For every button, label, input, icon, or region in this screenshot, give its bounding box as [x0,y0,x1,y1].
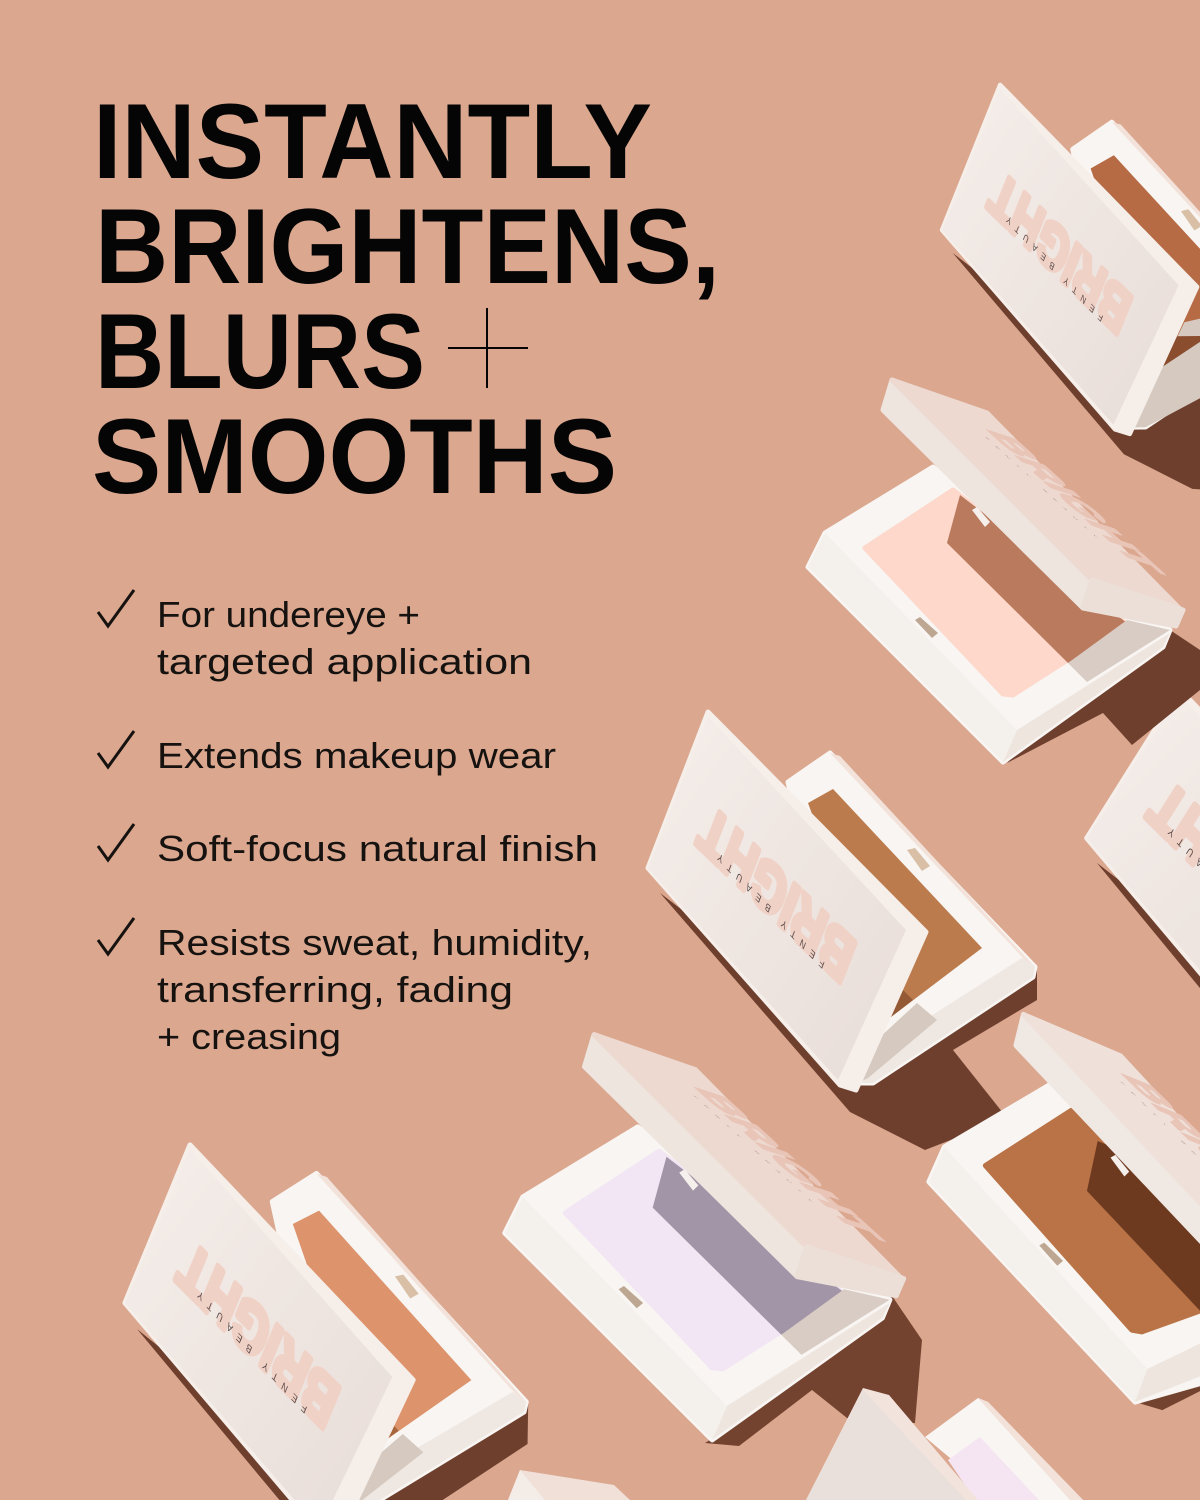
benefit: makeup wear: Extends makeup wear [157,735,556,776]
benefit: resists: transferring, fading [157,969,513,1010]
title: SMOOTHS [92,396,617,516]
benefit: finish: Soft-focus natural finish [157,828,598,869]
benefit: resists [98,918,592,1057]
compact: open, lavender: BRIGHT [684,1083,894,1244]
compact: center, bronze tan: BRIGHT [690,790,863,996]
compact: open, pale peach [808,380,1200,763]
title: BLURS [95,291,425,411]
benefit: undereye: For undereye + [157,594,420,635]
compact: open, deep bronze [921,1007,1200,1426]
title [92,81,720,516]
compact: bottom left, peach: FENTY BEAUTY [196,1287,309,1415]
compact: bottom, lavender partial [806,1388,1083,1500]
base and pan: peach [267,1172,530,1500]
compact: top right, bronze [937,82,1200,500]
compact: bottom left, peach: BRIGHT [169,1226,347,1444]
compact: bottom center, lid corner [508,1470,630,1500]
title: INSTANTLY [93,81,652,201]
compact: center, bronze tan [648,712,1037,1150]
compact: open, lavender: FENTY BEAUTY [692,1095,814,1203]
ground shadow: lavender compact [705,1290,922,1446]
compact: open, pale peach: FENTY BEAUTY [984,437,1099,538]
benefit: undereye [98,590,532,682]
benefit: resists: Resists sweat, humidity, [157,922,592,963]
benefit: finish [98,824,598,869]
benefit: resists: + creasing [157,1016,341,1057]
compact: right edge, partial [1043,687,1200,1132]
lid and pan shadow: deep bronze [1015,1014,1200,1335]
title: BRIGHTENS, [95,186,720,306]
compact: top right, bronze: BRIGHT [981,157,1139,347]
compact: top right, bronze: FENTY BEAUTY [1005,213,1104,324]
compact: center, bronze tan: FENTY BEAUTY [716,850,826,970]
compact: bottom left, peach [120,1143,532,1500]
compact: open, lavender [505,1035,904,1440]
icon: thin plus [448,308,528,388]
benefit: undereye: targeted application [157,641,532,682]
